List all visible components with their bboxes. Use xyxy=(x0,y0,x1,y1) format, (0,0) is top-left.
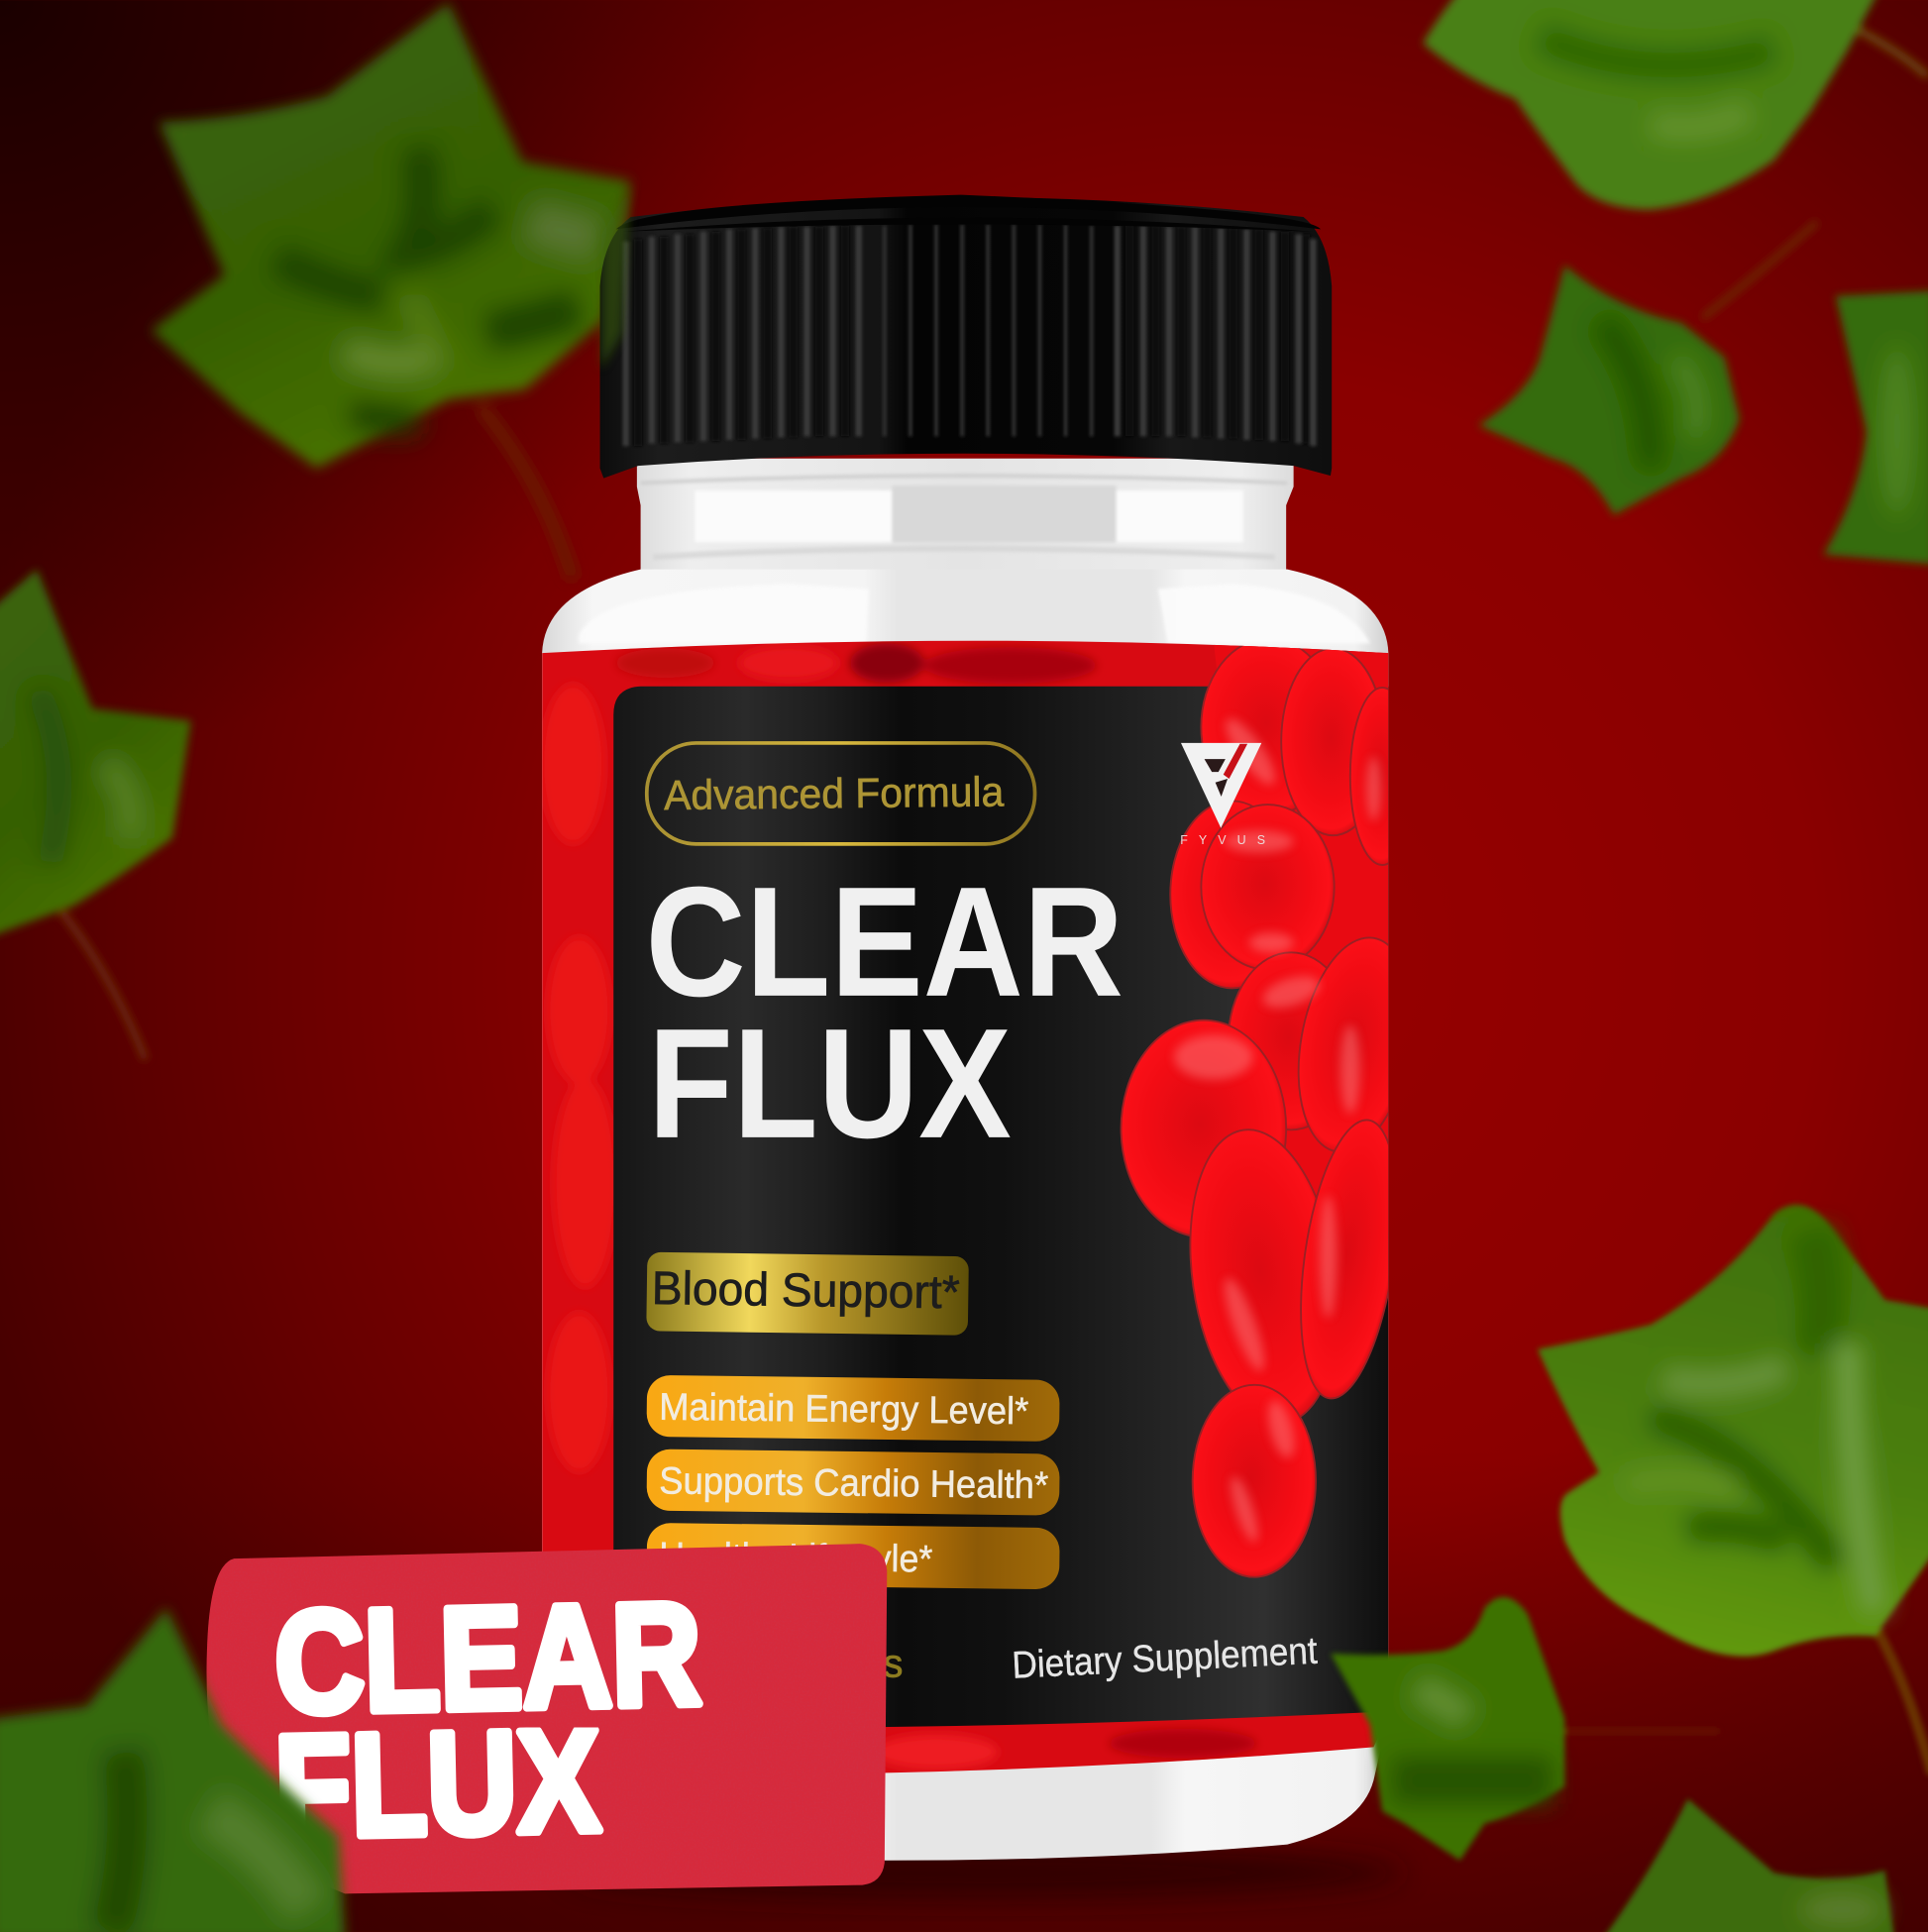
leaf: top right xyxy=(1423,0,1928,210)
bottle body xyxy=(542,570,1388,1861)
product name: FLUX xyxy=(648,997,1012,1171)
benefit: maintain energy xyxy=(646,1375,1060,1442)
bottle neck xyxy=(637,459,1294,580)
red product name card xyxy=(206,1544,887,1893)
benefit: cardio health xyxy=(646,1449,1060,1516)
leaf: left xyxy=(0,570,191,1060)
bottle label wrap xyxy=(541,638,1428,1775)
blood support badge xyxy=(646,1252,969,1336)
cap ridges xyxy=(626,224,1314,446)
product name xyxy=(646,855,1124,1171)
brand logo: FYVUS: FYVUS xyxy=(1180,833,1265,847)
card shape xyxy=(206,1544,887,1893)
leaf: top left xyxy=(152,3,631,580)
leaf: bottom mid xyxy=(1331,1597,1719,1861)
leaf: right edge xyxy=(1823,291,1928,565)
leaf: mid right xyxy=(1478,222,1817,515)
benefit: healthy lifestyle xyxy=(646,1523,1060,1589)
red label background xyxy=(542,641,1388,1775)
cap shell xyxy=(600,197,1332,479)
bottle shadow xyxy=(567,1846,1405,1900)
leaf: bottom left xyxy=(0,1608,345,1932)
leaf overlap on cap xyxy=(601,185,631,370)
benefit pills xyxy=(646,1375,1060,1589)
leaf: bottom right large xyxy=(1538,1205,1928,1774)
product name: CLEAR xyxy=(646,855,1124,1029)
backing red fill xyxy=(1214,641,1388,1233)
benefit: cardio health: Supports Cardio Health* xyxy=(659,1459,1048,1507)
red blood cells xyxy=(1120,644,1389,1578)
brand logo: FYVUS xyxy=(1180,743,1265,847)
cap xyxy=(600,195,1332,479)
black label panel xyxy=(613,687,1388,1728)
faded cells on label strips xyxy=(541,643,1256,1770)
product bottle xyxy=(541,195,1428,1861)
benefit: healthy lifestyle: Healthy Lifestyle* xyxy=(659,1535,933,1581)
advanced formula badge: Advanced Formula xyxy=(664,768,1005,818)
blood support badge: Blood Support* xyxy=(651,1262,960,1319)
leaf: bottom right lower xyxy=(1601,1799,1894,1932)
cap top rim xyxy=(616,195,1321,232)
card paper texture xyxy=(206,1544,887,1893)
card title CLEAR: CLEAR xyxy=(273,1573,702,1745)
card title FLUX: FLUX xyxy=(273,1699,601,1869)
dietary supplement text: Dietary Supplement xyxy=(1011,1630,1319,1687)
benefit: maintain energy: Maintain Energy Level* xyxy=(659,1386,1029,1433)
capsule count: Capsules xyxy=(739,1642,903,1685)
advanced formula badge xyxy=(647,743,1034,844)
cell highlights xyxy=(1174,712,1381,1545)
